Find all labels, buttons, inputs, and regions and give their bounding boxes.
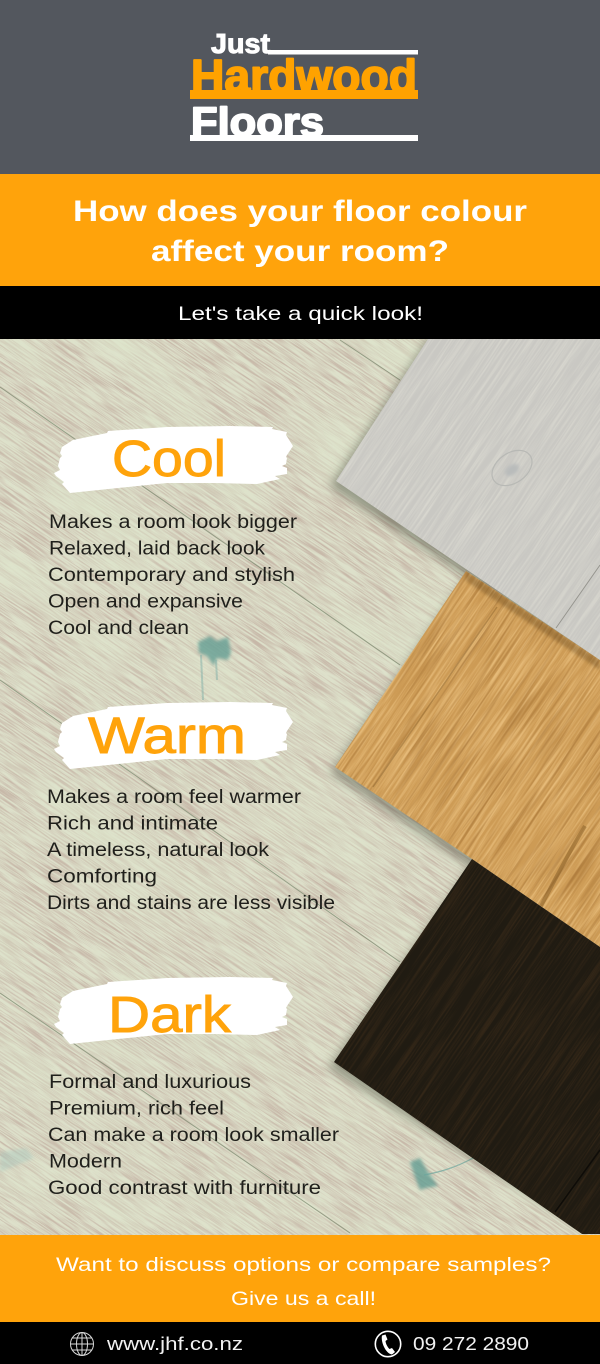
list: Warm traits: Comforting <box>47 866 157 888</box>
title text <box>73 195 527 268</box>
title text: affect your room? <box>151 235 449 268</box>
list: Warm traits <box>47 787 335 914</box>
list: Cool traits: Makes a room look bigger <box>49 512 298 533</box>
list: Dark traits: Good contrast with furniture <box>48 1178 321 1199</box>
logo word: Just: Just <box>211 28 270 59</box>
dark floor sample <box>330 855 600 1235</box>
contact bar <box>0 1322 600 1364</box>
cool (light grey) floor sample <box>330 339 600 664</box>
oak (warm) floor sample <box>330 560 600 960</box>
list: Warm traits: A timeless, natural look <box>47 840 270 861</box>
call to action text: Give us a call! <box>231 1288 376 1310</box>
list: Cool traits: Cool and clean <box>48 618 189 639</box>
heading: Cool: Cool <box>112 430 226 487</box>
list: Cool traits: Open and expansive <box>48 592 243 612</box>
section: Cool <box>48 426 298 639</box>
heading: Warm: Warm <box>88 707 246 764</box>
list: Dark traits: Can make a room look smaller <box>48 1125 340 1146</box>
logo: Just Hardwood Floors <box>190 28 418 145</box>
call to action text: Want to discuss options or compare samples? <box>56 1254 551 1276</box>
logo word: Floors: Floors <box>191 99 324 145</box>
list: Warm traits: Makes a room feel warmer <box>47 787 302 808</box>
icon: telephone <box>375 1331 401 1357</box>
logo word: Floors <box>190 99 418 145</box>
call to action band <box>0 1235 600 1322</box>
header band with logo <box>0 0 600 174</box>
floor knot: upper <box>198 636 231 700</box>
logo word: Hardwood: Hardwood <box>191 50 417 102</box>
list: Cool traits: Relaxed, laid back look <box>49 538 266 560</box>
list: Dark traits <box>48 1072 340 1199</box>
section: Warm <box>47 702 335 914</box>
list: Dark traits: Formal and luxurious <box>49 1072 251 1093</box>
heading: Dark: Dark <box>108 986 232 1043</box>
list: Cool traits <box>48 512 298 639</box>
section: Dark <box>48 977 340 1199</box>
floor knot: lower right <box>410 1157 475 1190</box>
brush stroke: Warm <box>54 702 293 769</box>
floor knot: left edge <box>0 1148 34 1172</box>
panel shadows <box>328 339 600 1225</box>
list: Cool traits: Contemporary and stylish <box>48 565 295 586</box>
wood floor background <box>0 339 600 1235</box>
brush stroke: Dark <box>54 977 293 1044</box>
intro band <box>0 286 600 339</box>
call to action text <box>56 1254 551 1310</box>
list: Dark traits: Premium, rich feel <box>49 1098 224 1120</box>
icon: globe <box>70 1332 94 1356</box>
intro text: Let's take a quick look! <box>178 303 423 325</box>
list: Dark traits: Modern <box>49 1152 122 1172</box>
brush stroke: Cool <box>54 426 293 493</box>
list: Warm traits: Rich and intimate <box>47 814 218 834</box>
list: Warm traits: Dirts and stains are less visible <box>47 893 335 914</box>
phone number: 09 272 2890 <box>413 1333 529 1354</box>
website: www.jhf.co.nz <box>106 1333 243 1354</box>
title text: How does your floor colour <box>73 195 527 228</box>
title band <box>0 174 600 286</box>
